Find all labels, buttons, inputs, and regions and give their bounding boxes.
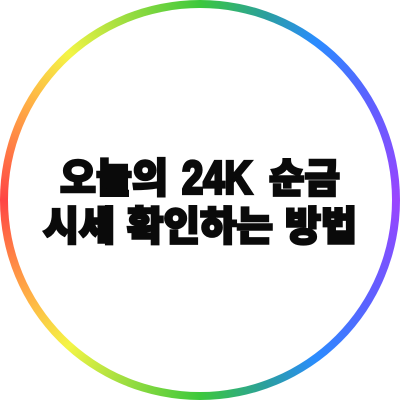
title line 2: 시세 — [43, 205, 115, 249]
title line 1 — [60, 152, 340, 204]
title line 1: 24K — [182, 152, 252, 204]
title line 2 — [43, 205, 357, 249]
title line 2: 방법 — [285, 205, 357, 249]
title line 1: 오늘의 — [60, 157, 168, 201]
title line 1: 순금 — [269, 157, 340, 201]
title line 2: 확인하는 — [127, 205, 273, 249]
